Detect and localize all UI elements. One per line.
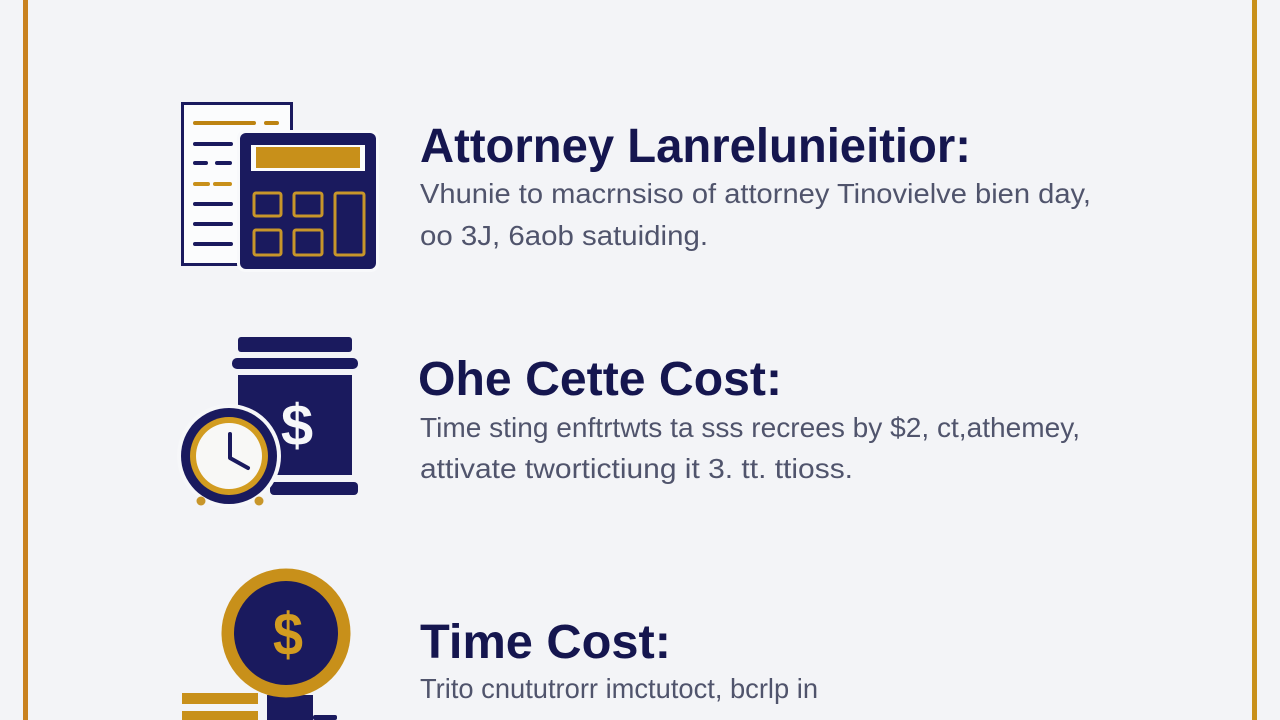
panel: attorney item <box>182 104 1091 272</box>
text block: attorney description <box>420 178 1091 251</box>
text block: one cost description <box>420 412 1080 484</box>
icon: coin and stacks: $ <box>273 601 303 668</box>
panel: one cost item <box>177 337 1080 508</box>
heading: time cost: Time Cost: <box>420 616 671 669</box>
panel: time cost item <box>182 568 818 720</box>
icon: jar with dollar and clock <box>177 337 358 508</box>
text block: one cost description: attivate twortictiung it 3. tt. ttioss. <box>420 453 853 484</box>
heading: one cost: Ohe Cette Cost: <box>418 353 782 406</box>
icon: document and calculator <box>182 104 379 272</box>
text block: attorney description: oo 3J, 6aob satuiding. <box>420 220 708 251</box>
text block: attorney description: Vhunie to macrnsiso of attorney Tinovielve bien day, <box>420 178 1091 209</box>
heading: attorney: Attorney Lanrelunieitior: <box>420 120 971 173</box>
text block: time cost description: Trito cnututrorr imctutoct, bcrlp in <box>420 673 818 704</box>
text block: one cost description: Time sting enftrtwts ta sss recrees by $2, ct,athemey, <box>420 412 1080 443</box>
icon: coin and stacks <box>182 568 350 720</box>
icon: jar with dollar and clock: $ <box>281 393 313 458</box>
